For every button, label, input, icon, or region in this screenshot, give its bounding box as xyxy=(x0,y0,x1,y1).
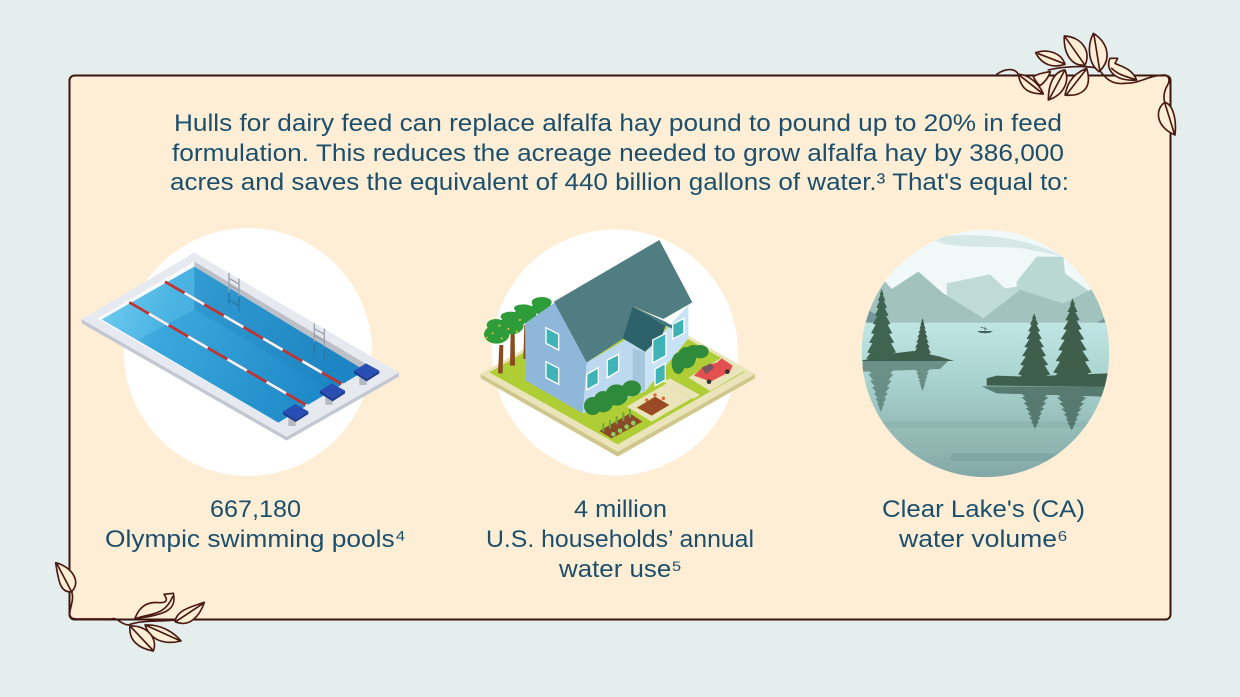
left small pine xyxy=(914,318,931,355)
vegetable beds xyxy=(599,393,669,438)
caption: Clear Lake: water volume⁶ xyxy=(898,526,1068,553)
starting block 1 xyxy=(283,404,308,426)
right shore xyxy=(987,373,1108,387)
windows xyxy=(546,318,684,390)
caption: pools: Olympic swimming pools⁴ xyxy=(105,526,406,553)
lane rope far xyxy=(165,282,343,385)
ladder left xyxy=(229,273,239,312)
decoration: top-right leaves xyxy=(997,33,1175,135)
caption: households xyxy=(486,496,754,583)
icon: house xyxy=(481,240,755,457)
caption: households: water use⁵ xyxy=(558,556,682,583)
boat xyxy=(978,327,992,334)
intro paragraph xyxy=(170,110,1069,196)
lot platform xyxy=(481,295,755,457)
caption: Clear Lake: Clear Lake's (CA) xyxy=(882,496,1085,523)
fruit trees xyxy=(484,297,552,373)
panel: content card xyxy=(70,76,1170,620)
caption: pools xyxy=(105,496,406,553)
left tall pine xyxy=(866,289,897,360)
starting block 3 xyxy=(354,363,379,385)
left shore xyxy=(860,351,954,361)
lane rope near xyxy=(129,302,307,406)
bushes xyxy=(584,345,709,415)
decoration: bottom-left leaves xyxy=(56,563,204,651)
intro paragraph: acres and saves the equivalent of 440 billion gallons of water.³ That's equal to: xyxy=(170,169,1069,196)
right pines xyxy=(1018,314,1050,377)
caption: households: U.S. households’ annual xyxy=(486,526,754,553)
caption: households: 4 million xyxy=(574,496,667,523)
intro paragraph: Hulls for dairy feed can replace alfalfa hay pound to pound up to 20% in feed xyxy=(174,110,1062,137)
roof xyxy=(554,240,692,362)
white circle behind pool xyxy=(124,228,372,476)
intro paragraph: formulation. This reduces the acreage needed to grow alfalfa hay by 386,000 xyxy=(172,140,1064,167)
caption: Clear Lake xyxy=(882,496,1085,553)
caption: pools: 667,180 xyxy=(210,496,301,523)
house walls xyxy=(525,302,688,413)
starting block 2 xyxy=(320,383,345,405)
red truck xyxy=(694,358,733,384)
left reflections xyxy=(863,361,948,412)
right reflections xyxy=(982,386,1108,430)
icon: lake scene xyxy=(862,230,1110,478)
icon: swimming pool xyxy=(82,253,399,441)
white circle behind house xyxy=(492,230,738,476)
ladder right xyxy=(314,323,324,360)
